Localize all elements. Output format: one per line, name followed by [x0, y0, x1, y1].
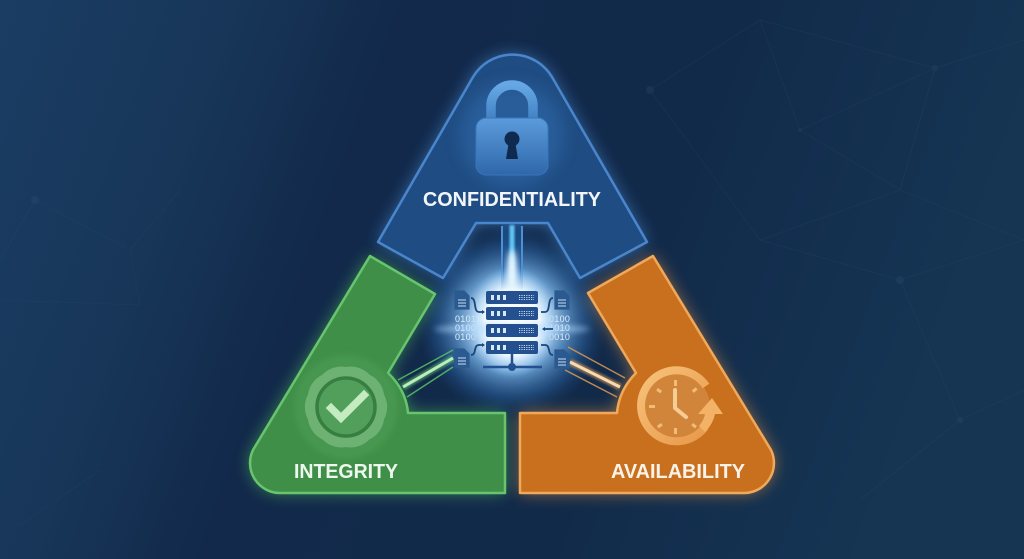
panel: confidentiality: [378, 55, 647, 278]
connector: blue beam: [502, 225, 522, 295]
icon: server stack: [483, 291, 542, 371]
icon: padlock: [460, 83, 564, 187]
icon: verified badge: [294, 355, 398, 459]
binary text: right: 0010: [549, 332, 570, 342]
icon: clock with arrow: [640, 370, 723, 442]
binary text: left: [455, 314, 481, 342]
binary text: left: 0100: [455, 323, 476, 333]
connector: green beams: [398, 350, 453, 397]
label: availability: AVAILABILITY: [611, 461, 746, 483]
binary text: left: 01011: [455, 314, 481, 324]
central glow behind panels: [417, 227, 607, 417]
connector: orange beams: [565, 347, 625, 397]
panel: integrity: [250, 256, 505, 493]
binary text: right: 1010: [549, 323, 570, 333]
binary text: right: 0100: [549, 314, 570, 324]
panel: availability: [520, 256, 774, 493]
binary text: left: 0100: [455, 332, 476, 342]
label: integrity: INTEGRITY: [294, 461, 399, 483]
vertical flare: [507, 250, 517, 294]
label: confidentiality: CONFIDENTIALITY: [423, 189, 602, 211]
binary text: right: [549, 314, 570, 342]
central glow over hub: [466, 266, 558, 378]
icon: documents with arrows: [455, 291, 569, 368]
horizontal flare: [434, 324, 590, 334]
